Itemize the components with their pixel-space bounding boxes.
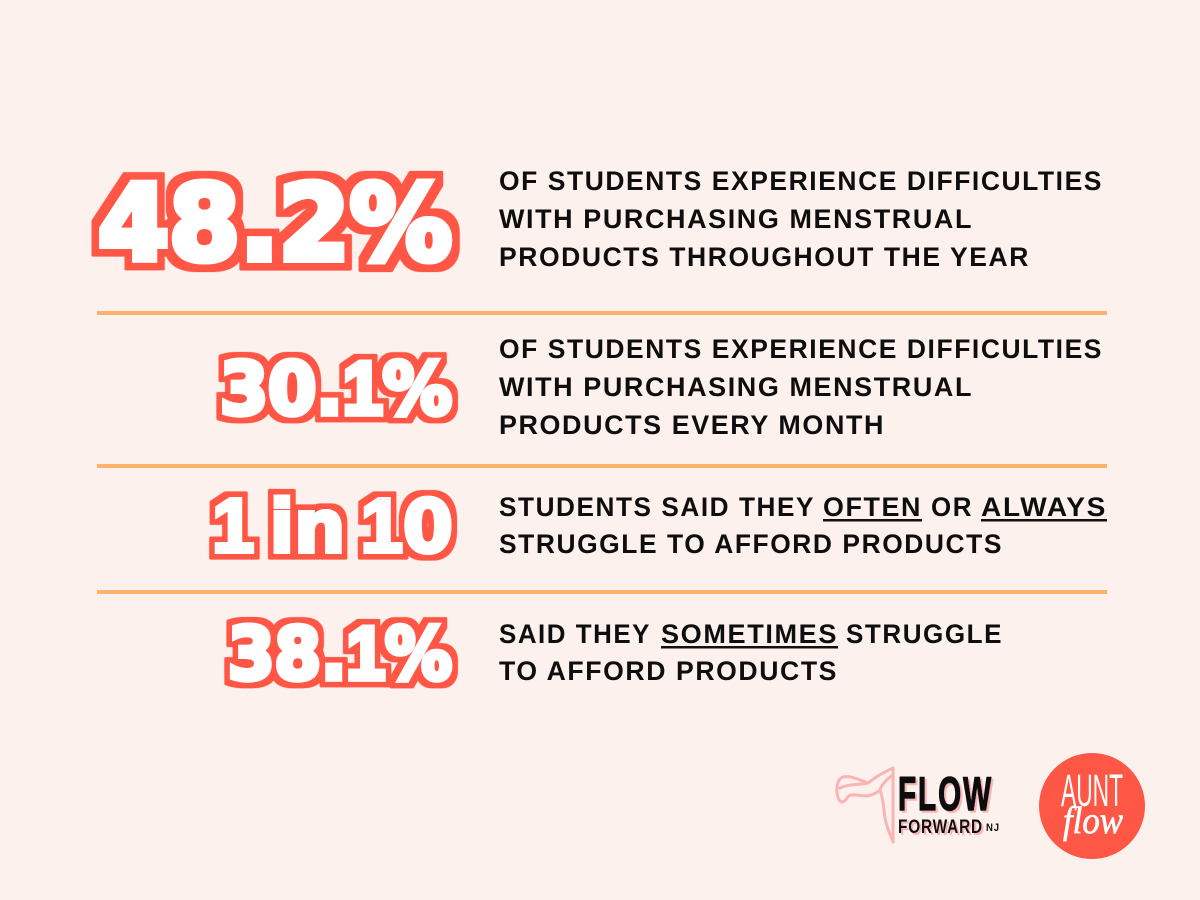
text block: 48.2% description: OF STUDENTS EXPERIENCE DIFFICULTIES <box>499 166 1103 196</box>
text block: 38.1% description <box>499 619 1003 686</box>
text block: 30.1% description <box>499 334 1103 440</box>
logo: Aunt Flow: flow <box>1063 800 1124 842</box>
text block: 48.2% description: PRODUCTS THROUGHOUT THE YEAR <box>499 242 1030 272</box>
text block: 1 in 10 description: STUDENTS SAID THEY <box>499 492 815 522</box>
stat: 1 in 10: 1 in 10 <box>212 483 453 570</box>
text block: 48.2% description <box>499 166 1103 272</box>
logo: Aunt Flow <box>1039 753 1145 859</box>
text block: 38.1% description: SAID THEY <box>499 619 651 649</box>
stat: 48.2%: 48.2% <box>98 162 452 284</box>
text block: 38.1% description: SOMETIMES <box>661 619 838 649</box>
text block: 30.1% description: OF STUDENTS EXPERIENCE DIFFICULTIES <box>499 334 1103 364</box>
text block: 30.1% description: PRODUCTS EVERY MONTH <box>499 410 885 440</box>
text block: 30.1% description: WITH PURCHASING MENSTRUAL <box>499 372 973 402</box>
stat: 38.1%: 38.1% <box>228 611 452 696</box>
text block: 1 in 10 description: OR <box>931 492 973 522</box>
stat: 30.1%: 30.1% <box>220 346 452 431</box>
icon: uterus outline <box>837 768 893 842</box>
text block: 1 in 10 description: ALWAYS <box>981 492 1107 522</box>
text block: 1 in 10 description <box>499 492 1107 559</box>
text block: 38.1% description: TO AFFORD PRODUCTS <box>499 656 838 686</box>
text block: 1 in 10 description: STRUGGLE TO AFFORD PRODUCTS <box>499 529 1003 559</box>
logo: Flow Forward NJ: NJ <box>986 822 1000 834</box>
logo: Flow Forward NJ <box>837 767 1000 842</box>
wordmark: FORWARD <box>898 817 983 838</box>
text block: 38.1% description: STRUGGLE <box>846 619 1003 649</box>
wordmark: FLOW <box>898 767 993 820</box>
wordmark <box>898 767 993 838</box>
logo: Aunt Flow: AUNT <box>1061 765 1123 816</box>
text block: 1 in 10 description: OFTEN <box>823 492 922 522</box>
text block: 48.2% description: WITH PURCHASING MENSTRUAL <box>499 204 973 234</box>
